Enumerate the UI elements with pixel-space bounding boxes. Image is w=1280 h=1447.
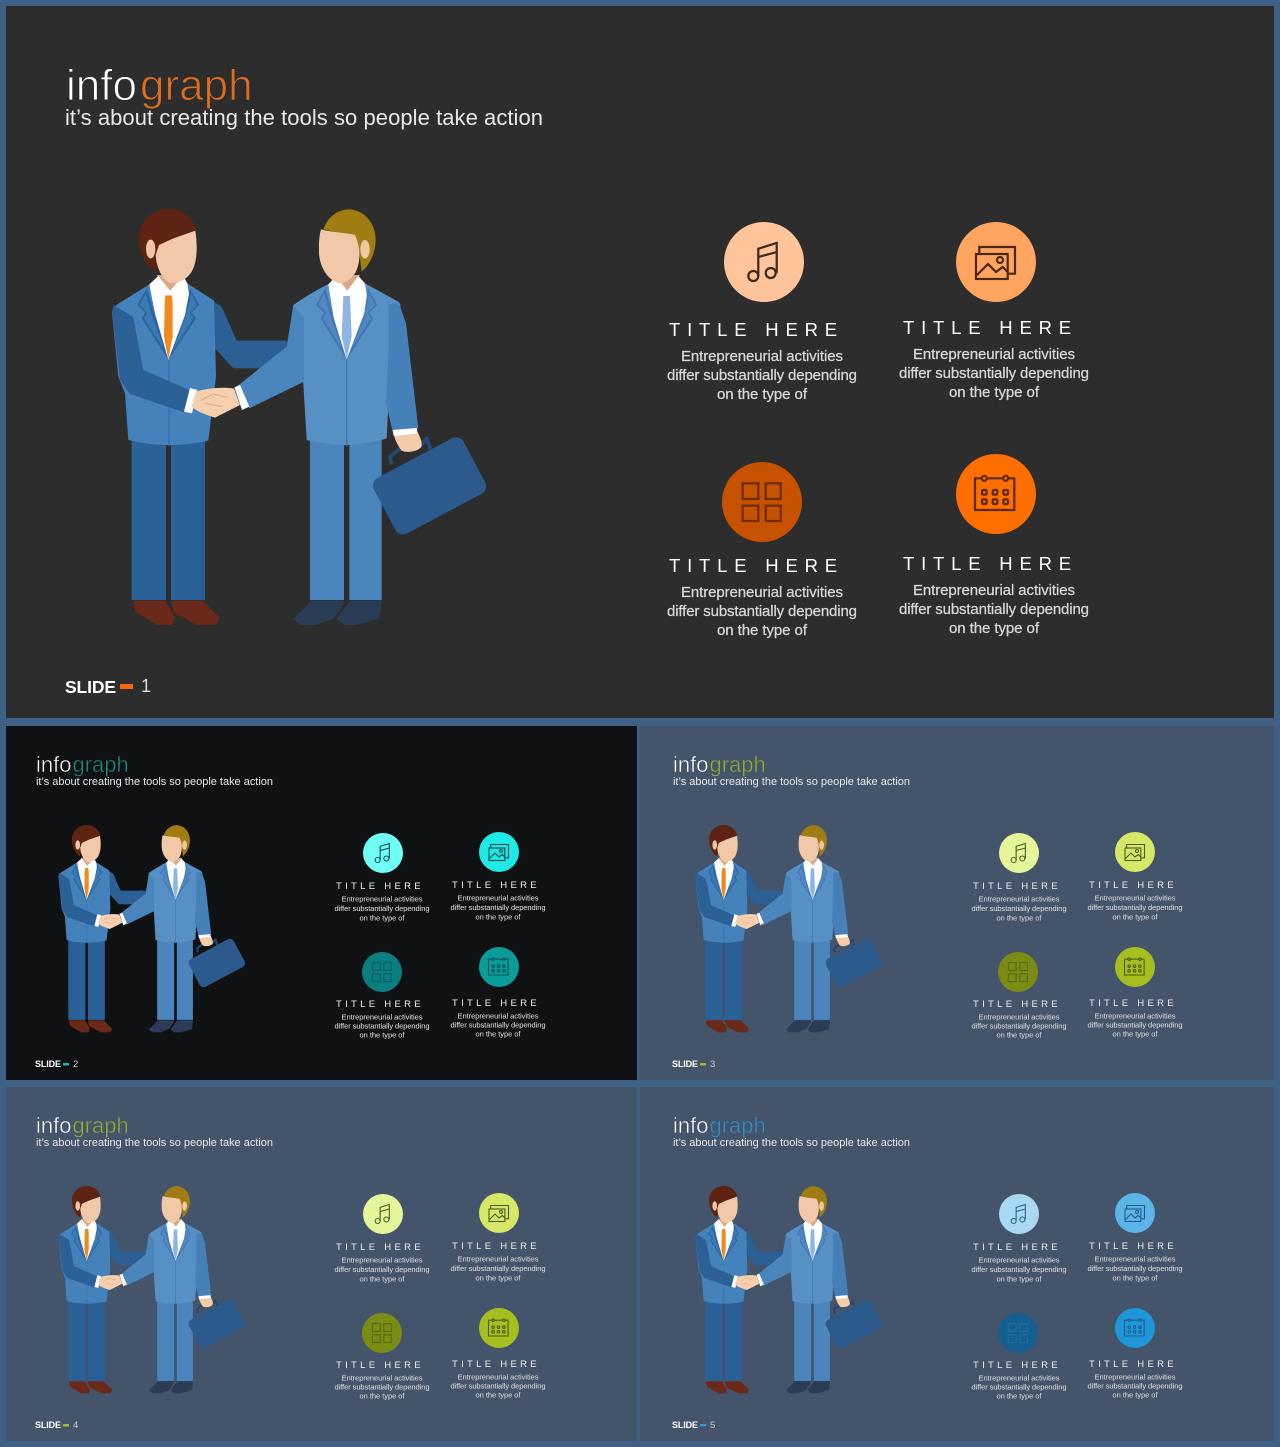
item text block: differ substantially depending bbox=[334, 1265, 430, 1274]
item text block: differ substantially depending bbox=[334, 1382, 430, 1392]
item text block: Entrepreneurial activities bbox=[458, 1012, 539, 1020]
item text block: differ substantially depending bbox=[972, 1265, 1066, 1274]
subtitle: it’s about creating the tools so people take action bbox=[65, 105, 543, 130]
item text block: TITLE HERE bbox=[1089, 998, 1177, 1009]
item text block: TITLE HERE bbox=[452, 880, 540, 891]
title: infograph: info bbox=[673, 752, 708, 777]
illustration: two businessmen shaking hands bbox=[58, 1186, 247, 1392]
item text block: on the type of bbox=[360, 1392, 405, 1400]
icon: calendar bbox=[956, 454, 1036, 534]
slide number bbox=[65, 676, 151, 697]
item text block: TITLE HERE bbox=[452, 998, 540, 1009]
item text block: Entrepreneurial activities bbox=[1094, 894, 1176, 902]
item text block: on the type of bbox=[1112, 1390, 1158, 1400]
item body text bbox=[899, 346, 1089, 401]
item text block: Entrepreneurial activities bbox=[458, 1372, 539, 1382]
item body text: differ substantially depending bbox=[899, 601, 1089, 618]
item text block: on the type of bbox=[476, 1030, 521, 1038]
item heading: TITLE HERE bbox=[903, 553, 1078, 574]
item text block: on the type of bbox=[360, 914, 405, 922]
slide number bbox=[35, 1059, 78, 1070]
item text block bbox=[334, 1241, 546, 1400]
title: infograph: graph bbox=[710, 752, 766, 777]
slide number: 3 bbox=[710, 1059, 715, 1070]
slide number: 1 bbox=[141, 676, 151, 696]
icon: grid bbox=[362, 952, 402, 992]
title: infograph: info bbox=[66, 61, 137, 110]
item text block bbox=[972, 880, 1182, 1040]
slide number bbox=[672, 1420, 715, 1431]
icon: pictures bbox=[1115, 832, 1155, 872]
item text block: differ substantially depending bbox=[450, 1020, 546, 1030]
item heading: TITLE HERE bbox=[669, 555, 844, 576]
item text block: on the type of bbox=[996, 1030, 1042, 1040]
item text block: Entrepreneurial activities bbox=[458, 1254, 539, 1264]
illustration: two businessmen shaking hands bbox=[695, 825, 884, 1031]
item text block: on the type of bbox=[1112, 1274, 1158, 1282]
item body text: Entrepreneurial activities bbox=[681, 348, 843, 365]
item text block: on the type of bbox=[1112, 1030, 1158, 1038]
icon: calendar bbox=[1115, 1308, 1155, 1348]
slide number: SLIDE bbox=[35, 1420, 61, 1430]
item text block: Entrepreneurial activities bbox=[978, 894, 1060, 904]
title: infograph: info bbox=[673, 1113, 708, 1138]
icon: calendar bbox=[1115, 947, 1155, 987]
slide number: SLIDE bbox=[65, 677, 116, 697]
icon: pictures bbox=[479, 1193, 519, 1233]
item text block bbox=[972, 1241, 1182, 1400]
illustration: two businessmen shaking hands bbox=[112, 209, 489, 623]
item text block: TITLE HERE bbox=[452, 1359, 540, 1370]
item text block: Entrepreneurial activities bbox=[978, 1256, 1060, 1264]
item body text bbox=[899, 582, 1089, 637]
icon: grid bbox=[998, 1313, 1038, 1353]
slide number: 5 bbox=[710, 1420, 715, 1431]
item text block: differ substantially depending bbox=[450, 1382, 546, 1390]
item text block: Entrepreneurial activities bbox=[1094, 1254, 1176, 1264]
item text block: differ substantially depending bbox=[450, 1264, 546, 1273]
item text block: TITLE HERE bbox=[973, 881, 1061, 892]
item body text: Entrepreneurial activities bbox=[681, 584, 843, 601]
item text block: differ substantially depending bbox=[972, 904, 1066, 913]
item text block: Entrepreneurial activities bbox=[342, 1374, 423, 1382]
icon: calendar bbox=[479, 947, 519, 987]
item text block: differ substantially depending bbox=[972, 1022, 1066, 1030]
icon: music note bbox=[363, 1194, 403, 1234]
item body text: on the type of bbox=[949, 620, 1040, 637]
title: infograph: info bbox=[36, 1113, 71, 1138]
item text block: TITLE HERE bbox=[973, 999, 1061, 1010]
item text block: TITLE HERE bbox=[1089, 1359, 1177, 1370]
slide number bbox=[672, 1059, 715, 1070]
item text block: differ substantially depending bbox=[972, 1382, 1066, 1392]
item text block: Entrepreneurial activities bbox=[342, 1256, 423, 1264]
slide number: SLIDE bbox=[672, 1420, 698, 1430]
item body text: on the type of bbox=[717, 622, 808, 639]
item text block: differ substantially depending bbox=[1088, 1382, 1182, 1390]
panel: slide 1 bbox=[6, 6, 1274, 718]
item text block: TITLE HERE bbox=[973, 1360, 1061, 1371]
item heading: TITLE HERE bbox=[903, 317, 1078, 338]
item text block: differ substantially depending bbox=[1088, 903, 1182, 912]
illustration: two businessmen shaking hands bbox=[58, 825, 247, 1031]
item text block: differ substantially depending bbox=[450, 903, 546, 912]
panel: slide 4 bbox=[6, 1087, 637, 1441]
item text block: on the type of bbox=[996, 1274, 1042, 1284]
subtitle: it’s about creating the tools so people take action bbox=[36, 776, 273, 788]
item text block: TITLE HERE bbox=[452, 1241, 540, 1252]
item body text bbox=[667, 584, 857, 639]
icon: pictures bbox=[1115, 1193, 1155, 1233]
item body text: Entrepreneurial activities bbox=[913, 346, 1075, 363]
title: infograph: graph bbox=[140, 61, 253, 110]
subtitle: it’s about creating the tools so people take action bbox=[36, 1137, 273, 1149]
icon: grid bbox=[722, 462, 802, 542]
item text block: TITLE HERE bbox=[973, 1242, 1061, 1253]
slide number: 4 bbox=[73, 1420, 78, 1431]
item body text: differ substantially depending bbox=[667, 367, 857, 384]
item text block: Entrepreneurial activities bbox=[1094, 1012, 1176, 1020]
item text block: differ substantially depending bbox=[334, 904, 430, 913]
item text block: on the type of bbox=[1112, 912, 1158, 922]
item text block: Entrepreneurial activities bbox=[978, 1374, 1060, 1382]
item body text: on the type of bbox=[949, 384, 1040, 401]
icon: music note bbox=[999, 833, 1039, 873]
panel: slide 3 bbox=[640, 726, 1274, 1080]
icon: grid bbox=[362, 1313, 402, 1353]
item text block: on the type of bbox=[476, 1390, 521, 1400]
item text block: on the type of bbox=[360, 1030, 405, 1040]
subtitle: it’s about creating the tools so people take action bbox=[673, 1137, 910, 1149]
item text block: on the type of bbox=[360, 1274, 405, 1284]
illustration: two businessmen shaking hands bbox=[695, 1186, 884, 1392]
item text block: on the type of bbox=[476, 912, 521, 922]
icon: pictures bbox=[479, 832, 519, 872]
slide number: 2 bbox=[73, 1059, 78, 1070]
item: grid bbox=[667, 462, 857, 639]
item body text: differ substantially depending bbox=[667, 603, 857, 620]
item body text: differ substantially depending bbox=[899, 365, 1089, 382]
title: infograph: graph bbox=[710, 1113, 766, 1138]
icon: music note bbox=[363, 833, 403, 873]
subtitle: it’s about creating the tools so people take action bbox=[673, 776, 910, 788]
panel: slide 5 bbox=[640, 1087, 1274, 1441]
item text block: Entrepreneurial activities bbox=[458, 894, 539, 902]
slide number bbox=[35, 1420, 78, 1431]
item: music bbox=[667, 222, 857, 403]
item: calendar bbox=[899, 454, 1089, 637]
slide number: SLIDE bbox=[35, 1059, 61, 1069]
item text block: differ substantially depending bbox=[334, 1022, 430, 1030]
icon: grid bbox=[998, 952, 1038, 992]
item text block: TITLE HERE bbox=[336, 1360, 424, 1371]
icon: music note bbox=[999, 1194, 1039, 1234]
item text block: TITLE HERE bbox=[336, 1242, 424, 1253]
icon: music note bbox=[724, 222, 804, 302]
title: infograph: graph bbox=[72, 752, 129, 777]
slide number: SLIDE bbox=[672, 1059, 698, 1069]
item text block: differ substantially depending bbox=[1088, 1020, 1182, 1030]
item text block bbox=[334, 880, 546, 1040]
title: infograph: graph bbox=[72, 1113, 129, 1138]
icon: calendar bbox=[479, 1308, 519, 1348]
panel: slide 2 bbox=[6, 726, 637, 1080]
item text block: differ substantially depending bbox=[1088, 1264, 1182, 1273]
item body text: Entrepreneurial activities bbox=[913, 582, 1075, 599]
item text block: TITLE HERE bbox=[336, 999, 424, 1010]
title: infograph: info bbox=[36, 752, 71, 777]
item text block: TITLE HERE bbox=[1089, 1241, 1177, 1252]
item heading: TITLE HERE bbox=[669, 319, 844, 340]
item text block: Entrepreneurial activities bbox=[342, 894, 423, 904]
item: image bbox=[899, 222, 1089, 401]
item text block: TITLE HERE bbox=[1089, 880, 1177, 891]
icon: pictures bbox=[956, 222, 1036, 302]
item body text bbox=[667, 348, 857, 403]
item body text: on the type of bbox=[717, 386, 808, 403]
item text block: Entrepreneurial activities bbox=[978, 1012, 1060, 1022]
item text block: TITLE HERE bbox=[336, 881, 424, 892]
item text block: Entrepreneurial activities bbox=[1094, 1372, 1176, 1382]
item text block: on the type of bbox=[996, 914, 1042, 922]
item text block: on the type of bbox=[476, 1274, 521, 1282]
item text block: Entrepreneurial activities bbox=[342, 1012, 423, 1022]
item text block: on the type of bbox=[996, 1392, 1042, 1400]
